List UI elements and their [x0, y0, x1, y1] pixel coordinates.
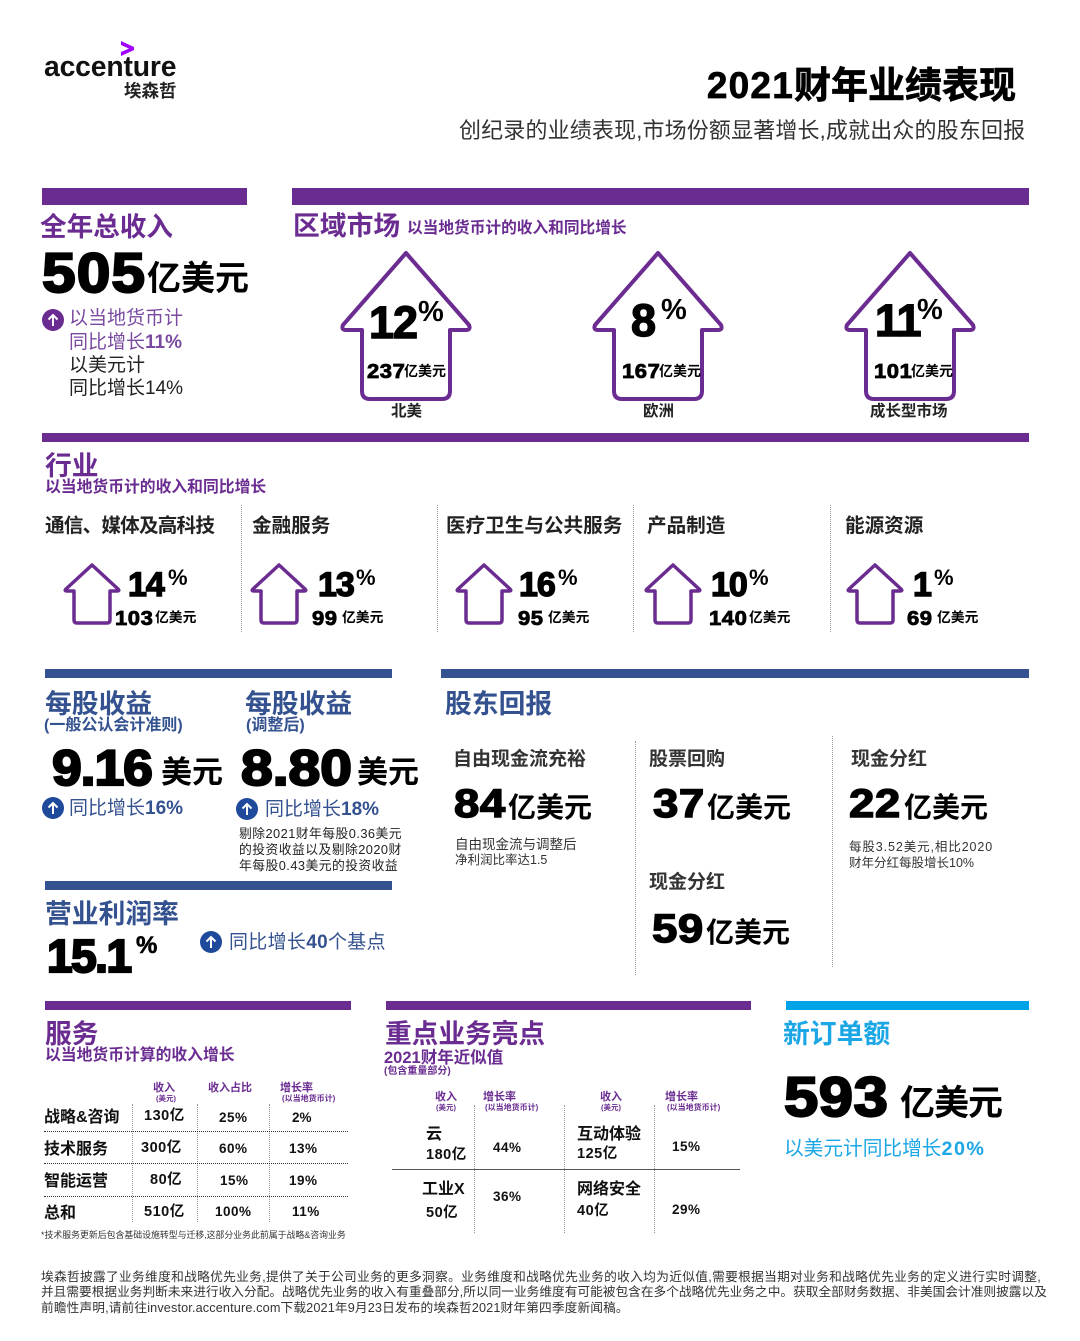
- share buyback: 股票回购: [649, 749, 725, 770]
- highlights table: (以当地货币计): [485, 1103, 538, 1112]
- logo: accenture: accenture: [44, 50, 176, 82]
- footnote: *技术服务更新后包含基础设施转型与迁移,这部分业务此前属于战略&咨询业务: [41, 1230, 346, 1240]
- region: growth markets: 101: [874, 361, 912, 383]
- cash dividends right: 22: [849, 782, 901, 826]
- footer disclaimer: [41, 1271, 1046, 1317]
- highlights table: 180亿: [426, 1147, 467, 1163]
- services table: 收入占比: [208, 1082, 252, 1094]
- region: growth markets: [844, 250, 976, 420]
- highlights table: 44%: [493, 1140, 522, 1155]
- heading: new bookings: 新订单额: [783, 1019, 890, 1049]
- heading: shareholder returns: 股东回报: [445, 689, 552, 719]
- industry: products: 10: [711, 566, 747, 604]
- growth text: [69, 308, 183, 399]
- growth: 16%: 同比增长16%: [69, 798, 183, 819]
- cash dividends right: 每股3.52美元,相比2020: [849, 840, 993, 854]
- value: 9.16: 美元: [161, 755, 223, 790]
- industry: resources: 亿美元: [937, 610, 978, 625]
- highlights table: 增长率: [483, 1091, 516, 1103]
- highlights table: 增长率: [665, 1091, 698, 1103]
- highlights table: 网络安全: [577, 1181, 641, 1198]
- growth text: 同比增长11%: [69, 332, 182, 353]
- industry: products: 亿美元: [749, 610, 790, 625]
- region: North America: 北美: [391, 403, 422, 420]
- footer disclaimer: 前瞻性声明,请前往investor.accenture.com下载2021年9月23日发布的埃森哲2021财年第四季度新闻稿。: [41, 1301, 629, 1315]
- highlights table: 互动体验: [577, 1126, 641, 1143]
- subheading: 以当地货币计的收入和同比增长: [407, 220, 627, 237]
- free cash flow: 84: [454, 782, 506, 826]
- heading: operating margin: 营业利润率: [45, 899, 179, 929]
- heading: regional markets: 区域市场: [293, 211, 400, 241]
- region: Europe: %: [661, 294, 687, 326]
- icon: up arrow: [42, 797, 64, 819]
- services table: 60%: [219, 1141, 248, 1156]
- highlights table: 收入: [435, 1091, 457, 1103]
- value: 9.16: [52, 740, 223, 796]
- title: 2021财年业绩表现: [707, 65, 1016, 106]
- heading: GAAP EPS: 每股收益: [45, 689, 152, 719]
- region: growth markets: 11: [875, 295, 921, 346]
- region: Europe: 欧洲: [643, 403, 674, 420]
- subtitle: 创纪录的业绩表现,市场份额显著增长,成就出众的股东回报: [459, 118, 1025, 143]
- subheading: 以当地货币计的收入和同比增长: [45, 479, 266, 496]
- industry: communications: 亿美元: [155, 610, 196, 625]
- cash dividends left: [649, 872, 790, 951]
- growth text: 以美元计: [69, 355, 145, 376]
- growth text: 以当地货币计: [69, 308, 183, 329]
- services table: 510亿: [144, 1204, 185, 1220]
- value: 8.80: [241, 740, 419, 796]
- industry: communications: [45, 515, 215, 630]
- value: 9.16: 9.16: [52, 740, 152, 796]
- heading: adjusted EPS: 每股收益: [245, 689, 352, 719]
- icon: up arrow: [200, 931, 222, 953]
- industry: health and public service: %: [558, 565, 578, 590]
- industry: financial services: 金融服务: [252, 515, 330, 537]
- panel: regional markets: [292, 188, 1029, 420]
- region: growth markets: 亿美元: [911, 363, 953, 379]
- panel: operating margin: [45, 881, 392, 982]
- free cash flow: 自由现金流充裕: [453, 749, 586, 770]
- note: 的投资收益以及剔除2020财: [239, 842, 402, 857]
- services table: 增长率: [280, 1082, 313, 1094]
- share buyback: 37: [653, 782, 705, 826]
- industry: products: 140: [709, 608, 747, 630]
- footer disclaimer: 埃森哲披露了业务维度和战略优先业务,提供了关于公司业务的更多洞察。业务维度和战略优先业务的收入均为近似值,需要根据当期对业务和战略优先业务的定义进行实时调整,: [41, 1270, 1041, 1284]
- services table: 13%: [289, 1141, 318, 1156]
- region: growth markets: %: [917, 294, 943, 326]
- industry: financial services: %: [356, 565, 376, 590]
- highlights table: [392, 1090, 740, 1233]
- revenue value: 亿美元: [147, 260, 249, 298]
- region: North America: [340, 250, 472, 420]
- highlights table: 40亿: [577, 1203, 609, 1219]
- region: North America: %: [418, 296, 444, 328]
- panel: industries: [42, 433, 1029, 632]
- free cash flow: 自由现金流与调整后: [455, 837, 576, 852]
- free cash flow: 亿美元: [508, 792, 592, 823]
- value: 15.1%: 15.1: [47, 930, 131, 982]
- highlights table: 工业X: [422, 1181, 465, 1198]
- panel: services: [41, 1001, 351, 1240]
- highlights table: 收入: [600, 1091, 622, 1103]
- industry: financial services: 99: [312, 608, 338, 630]
- value: 593: 亿美元: [900, 1084, 1002, 1123]
- region: Europe: [592, 250, 724, 420]
- services table: 2%: [292, 1110, 312, 1125]
- heading: total revenue: 全年总收入: [40, 212, 173, 242]
- panel: shareholder returns: [441, 669, 1029, 975]
- services table: (美元): [156, 1094, 176, 1103]
- services table: 300亿: [141, 1140, 182, 1156]
- services table: (以当地货币计): [282, 1094, 335, 1103]
- industry: products: %: [749, 565, 769, 590]
- industry: health and public service: 95: [518, 608, 544, 630]
- industry: resources: [845, 515, 978, 630]
- services table: 80亿: [150, 1172, 182, 1188]
- industry: resources: %: [934, 565, 954, 590]
- growth: 18%: 同比增长18%: [265, 799, 379, 820]
- region: Europe: 167: [622, 361, 660, 383]
- industry: financial services: 13: [318, 566, 354, 604]
- revenue value: 505: [42, 241, 146, 304]
- logo: accenture: [44, 41, 176, 101]
- services table: 11%: [292, 1204, 320, 1219]
- cash dividends right: [849, 748, 993, 870]
- region: Europe: 8: [631, 295, 656, 346]
- services table: 15%: [220, 1173, 249, 1188]
- services table: 19%: [289, 1173, 318, 1188]
- industry: health and public service: [446, 515, 622, 630]
- icon: up arrow: [42, 309, 64, 331]
- region: Europe: 亿美元: [659, 363, 701, 379]
- subheading: GAAP: (一般公认会计准则): [44, 717, 183, 734]
- highlights table: 125亿: [577, 1146, 618, 1162]
- services table: 智能运营: [44, 1173, 108, 1190]
- panel: earnings per share: [42, 669, 419, 873]
- services table: 技术服务: [44, 1141, 108, 1158]
- panel: highlights: [384, 1001, 751, 1233]
- footer disclaimer: 并且需要根据业务判断未来进行收入分配。战略优先业务的收入有重叠部分,所以同一业务维度有可能被包含在多个战略优先业务之中。获取全部财务数据、非美国会计准则披露以及: [41, 1285, 1047, 1299]
- cash dividends left: 现金分红: [649, 872, 725, 893]
- logo: accenture: 埃森哲: [124, 81, 176, 101]
- value: 15.1%: %: [136, 932, 157, 959]
- industry: resources: 69: [907, 608, 933, 630]
- services table: 战略&咨询: [44, 1109, 120, 1126]
- services table: 100%: [215, 1204, 252, 1219]
- highlights table: 29%: [672, 1202, 701, 1217]
- free cash flow: 净利润比率达1.5: [455, 853, 547, 867]
- industry: resources: 1: [913, 566, 932, 604]
- highlights table: 15%: [672, 1139, 701, 1154]
- cash dividends right: 财年分红每股增长10%: [849, 856, 974, 870]
- highlights table: 云: [426, 1126, 442, 1143]
- industry: communications: 14: [128, 566, 164, 604]
- highlights table: 36%: [493, 1189, 522, 1204]
- industry: financial services: [250, 515, 383, 630]
- region: North America: 237: [367, 361, 405, 383]
- note: 年每股0.43美元的投资收益: [239, 858, 398, 873]
- services table: 总和: [44, 1205, 76, 1222]
- industry: resources: 能源资源: [845, 515, 923, 537]
- subheading: adjusted: (调整后): [246, 717, 305, 734]
- note: [239, 826, 402, 873]
- industry: communications: 103: [115, 608, 153, 630]
- cash dividends left: 亿美元: [706, 917, 790, 948]
- highlights table: (美元): [436, 1103, 456, 1112]
- growth: 20%: 以美元计同比增长20%: [784, 1138, 985, 1160]
- free cash flow: [453, 748, 592, 867]
- industry: health and public service: 16: [519, 566, 555, 604]
- industry: communications: %: [168, 565, 188, 590]
- value: 593: 593: [784, 1065, 888, 1128]
- cash dividends right: 亿美元: [904, 792, 988, 823]
- share buyback: 亿美元: [707, 792, 791, 823]
- share buyback: [649, 748, 791, 826]
- value: 8.80: 8.80: [241, 740, 352, 796]
- subheading: 2021财年近似值: [384, 1049, 503, 1067]
- growth: 40 bp: 同比增长40个基点: [229, 932, 386, 953]
- value: 8.80: 美元: [357, 755, 419, 790]
- industry: health and public service: 医疗卫生与公共服务: [446, 515, 622, 537]
- region: North America: 亿美元: [404, 363, 446, 379]
- revenue value: [42, 241, 249, 304]
- panel: new bookings: [783, 1001, 1029, 1160]
- services table: 收入: [153, 1082, 175, 1094]
- growth text: 同比增长14%: [69, 378, 183, 399]
- note: (包含重量部分): [384, 1066, 451, 1077]
- cash dividends left: 59: [652, 907, 704, 951]
- heading: highlights: 重点业务亮点: [385, 1019, 545, 1049]
- industry: communications: 通信、媒体及高科技: [45, 515, 214, 537]
- note: 剔除2021财年每股0.36美元: [239, 826, 402, 841]
- highlights table: (美元): [601, 1103, 621, 1112]
- value: 593: [784, 1065, 1002, 1128]
- highlights table: (以当地货币计): [667, 1103, 720, 1112]
- services table: 130亿: [144, 1108, 185, 1124]
- region: growth markets: 成长型市场: [870, 403, 948, 420]
- cash dividends right: 现金分红: [851, 749, 927, 770]
- industry: products: 产品制造: [647, 515, 725, 537]
- services table: 25%: [219, 1110, 248, 1125]
- heading: services: 服务: [45, 1019, 99, 1049]
- services table: [44, 1082, 348, 1222]
- subheading: 以当地货币计算的收入增长: [45, 1047, 235, 1064]
- region: North America: 12: [369, 297, 417, 348]
- panel: total revenue: [40, 188, 249, 399]
- highlights table: 50亿: [426, 1205, 458, 1221]
- industry: financial services: 亿美元: [342, 610, 383, 625]
- industry: products: [644, 515, 790, 630]
- industry: health and public service: 亿美元: [548, 610, 589, 625]
- icon: up arrow: [236, 798, 258, 820]
- heading: industries: 行业: [45, 451, 99, 481]
